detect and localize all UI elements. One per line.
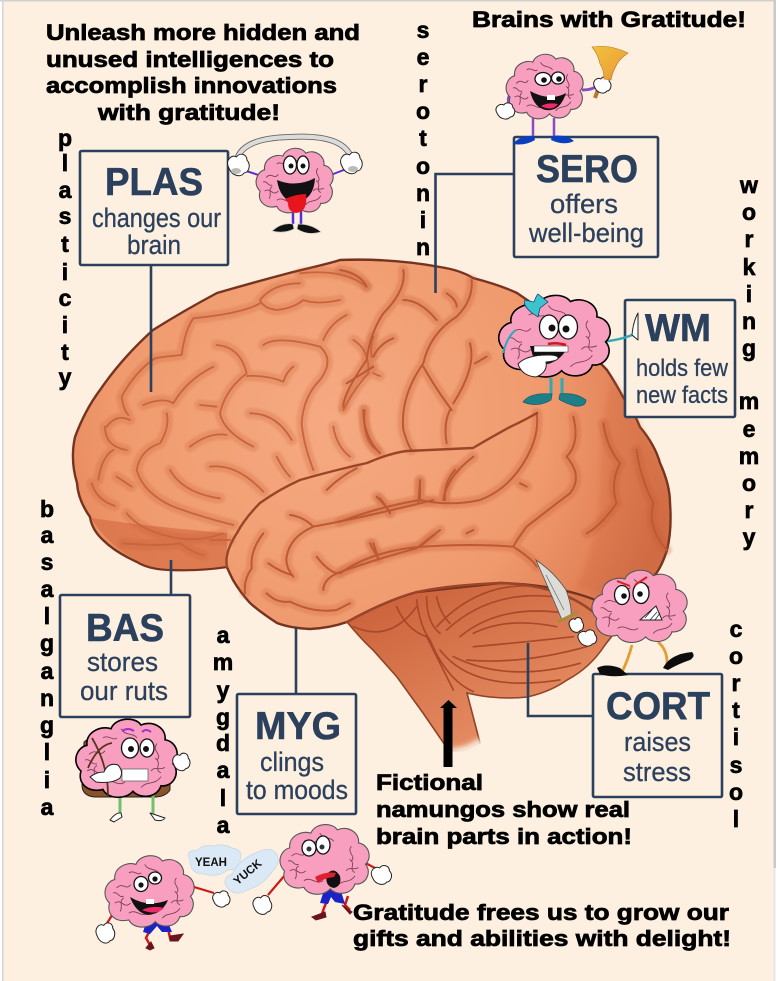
panel: MYG: MYG: [255, 705, 341, 748]
character: PLAS namungo stretching band: [228, 137, 362, 233]
character: BAS namungo with backpack: [76, 719, 190, 822]
panel: MYG: [237, 694, 356, 814]
panel: WM: new facts: [636, 382, 728, 409]
panel: CORT: stress: [623, 757, 691, 787]
brainstem fade: [437, 738, 490, 760]
cerebellum and brainstem: [347, 575, 640, 751]
gyri shading temporal: [245, 468, 455, 611]
caption: fictional namungos: brain parts in action!: [376, 824, 632, 849]
connector: BAS to brain: [170, 560, 172, 595]
heading: unleash intelligences: Unleash more hidden and: [46, 20, 360, 45]
heading: unleash intelligences: unused intelligences to: [46, 47, 334, 72]
occipital shading: [576, 378, 667, 606]
heading: unleash intelligences: accomplish innovations: [46, 73, 337, 98]
connector: CORT to brain: [528, 643, 593, 716]
sylvian fissure: [226, 413, 593, 622]
illustration: human brain: [73, 260, 671, 760]
cloud: YEAH: [188, 845, 241, 875]
panel: WM: holds few: [636, 355, 729, 382]
panel: CORT: raises: [624, 727, 691, 757]
connector: MYG to brain: [295, 627, 297, 694]
panel: MYG: to moods: [246, 775, 348, 805]
panel: BAS: BAS: [86, 607, 164, 650]
sulci rear: [340, 270, 667, 573]
panel: PLAS: [80, 151, 228, 265]
character: SERO namungo with bell: [496, 46, 628, 144]
connector: PLAS to brain: [150, 265, 152, 392]
connector: SERO to brain: [436, 174, 514, 293]
caption: gratitude frees us: gifts and abilities with delight!: [353, 926, 731, 951]
gyri shading: [92, 272, 380, 555]
vertical label: cortisol: cortisol: [729, 616, 743, 832]
sulci temporal: [245, 468, 455, 611]
gyri shading right: [340, 270, 667, 573]
arrow: points up at brain stem: [440, 700, 457, 767]
heading: unleash intelligences: [46, 20, 360, 125]
lower frontal shading: [91, 518, 227, 569]
vertical label: amygdala: amygdala: [213, 622, 233, 838]
caption: gratitude frees us: [353, 900, 731, 951]
panel: BAS: our ruts: [80, 676, 168, 706]
panel: SERO: well-being: [528, 218, 644, 248]
caption: fictional namungos: [376, 770, 632, 849]
panel: BAS: stores: [87, 647, 158, 677]
panel: CORT: CORT: [606, 685, 710, 728]
cloud: YUCK: [225, 849, 278, 893]
character: right bottom namungo: [253, 825, 391, 920]
character: left bottom namungo: [96, 856, 230, 950]
cloud: YUCK: YUCK: [232, 857, 265, 888]
caption: fictional namungos: namungos show real: [376, 797, 630, 822]
panel: PLAS: PLAS: [105, 161, 203, 204]
cloud: YEAH: YEAH: [195, 857, 227, 869]
panel: SERO: SERO: [536, 148, 638, 191]
character: WM namungo pointing: [499, 294, 638, 406]
panel: CORT: [593, 674, 722, 797]
panel: PLAS: brain: [127, 230, 181, 260]
panel: PLAS: changes our: [92, 203, 221, 233]
panel: SERO: offers: [550, 189, 618, 219]
panel: BAS: [60, 595, 190, 717]
cerebellum folds: [353, 586, 587, 692]
caption: fictional namungos: Fictional: [376, 770, 483, 795]
panel: MYG: clings: [260, 747, 324, 777]
panel: SERO: [514, 137, 658, 257]
sulci front: [92, 272, 380, 555]
caption: gratitude frees us: Gratitude frees us to grow our: [353, 900, 730, 925]
vertical label: plasticity: plasticity: [58, 125, 72, 390]
character: CORT namungo with sword: [536, 560, 694, 676]
vertical label: basal ganglia: basal ganglia: [40, 496, 54, 820]
vertical label: serotonin: serotonin: [416, 17, 430, 260]
panel: WM: WM: [645, 307, 711, 350]
heading: unleash intelligences: with gratitude!: [97, 100, 280, 125]
panel: WM: [625, 300, 735, 417]
vertical label: working memory: working memory: [739, 172, 759, 550]
cerebrum: [73, 260, 671, 629]
heading: brains with gratitude: Brains with Gratitude!: [472, 7, 746, 32]
